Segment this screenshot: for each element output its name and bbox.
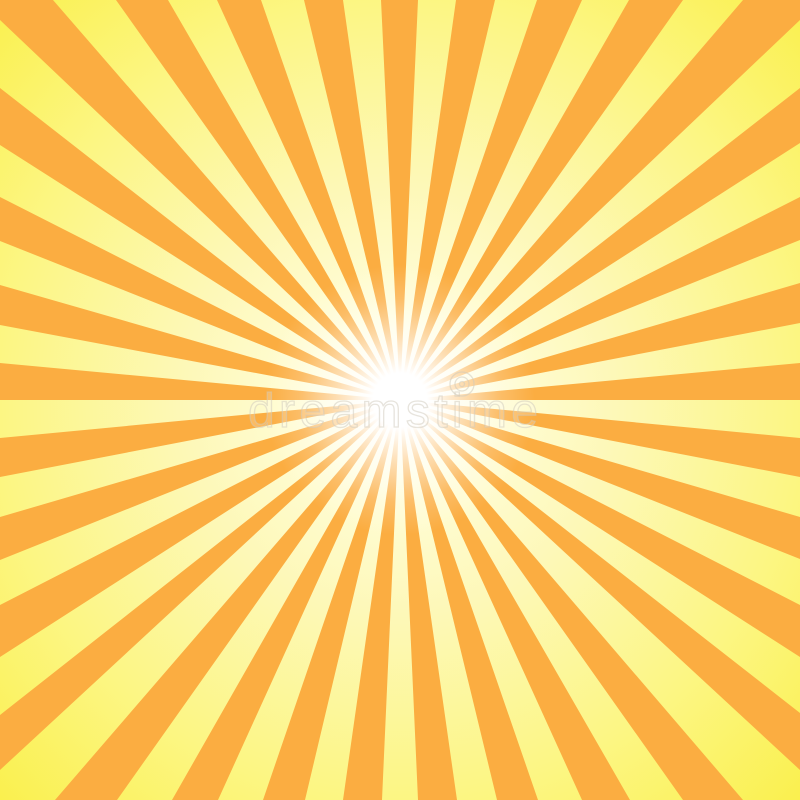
watermark xyxy=(248,372,538,438)
watermark logo xyxy=(450,372,474,396)
watermark text: dreamstime xyxy=(248,385,538,438)
central white glow xyxy=(265,265,535,535)
